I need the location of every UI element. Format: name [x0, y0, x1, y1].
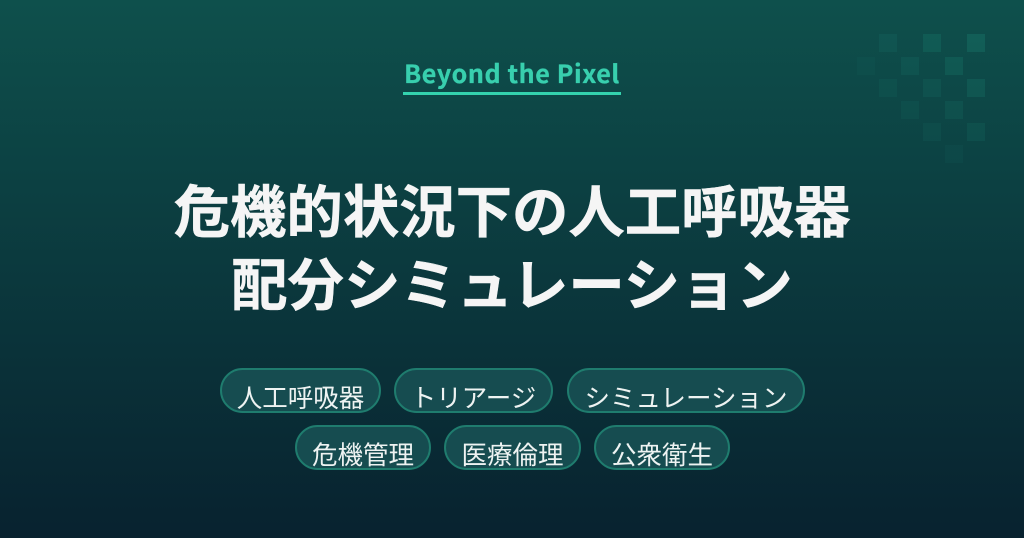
tag: 医療倫理: 医療倫理	[461, 435, 564, 472]
tag: 人工呼吸器	[220, 368, 381, 413]
tag: シミュレーション: シミュレーション	[584, 378, 787, 415]
tag: 人工呼吸器: 人工呼吸器	[237, 378, 364, 415]
tag: 公衆衛生: 公衆衛生	[611, 435, 713, 472]
tag: トリアージ: トリアージ	[411, 378, 536, 415]
tag: トリアージ	[394, 368, 553, 413]
title: 危機的状況下の人工呼吸器	[174, 168, 850, 249]
brand label: Beyond the Pixel: Beyond the Pixel	[404, 55, 620, 91]
title	[174, 168, 850, 322]
title: 配分シミュレーション	[231, 241, 793, 322]
tag: 危機管理	[295, 425, 431, 470]
icon: decorative pixel square pattern	[879, 34, 985, 141]
tag: 公衆衛生	[594, 425, 730, 470]
tag: シミュレーション	[567, 368, 805, 413]
tag: 危機管理: 危機管理	[312, 435, 414, 472]
tag: 医療倫理	[444, 425, 581, 470]
